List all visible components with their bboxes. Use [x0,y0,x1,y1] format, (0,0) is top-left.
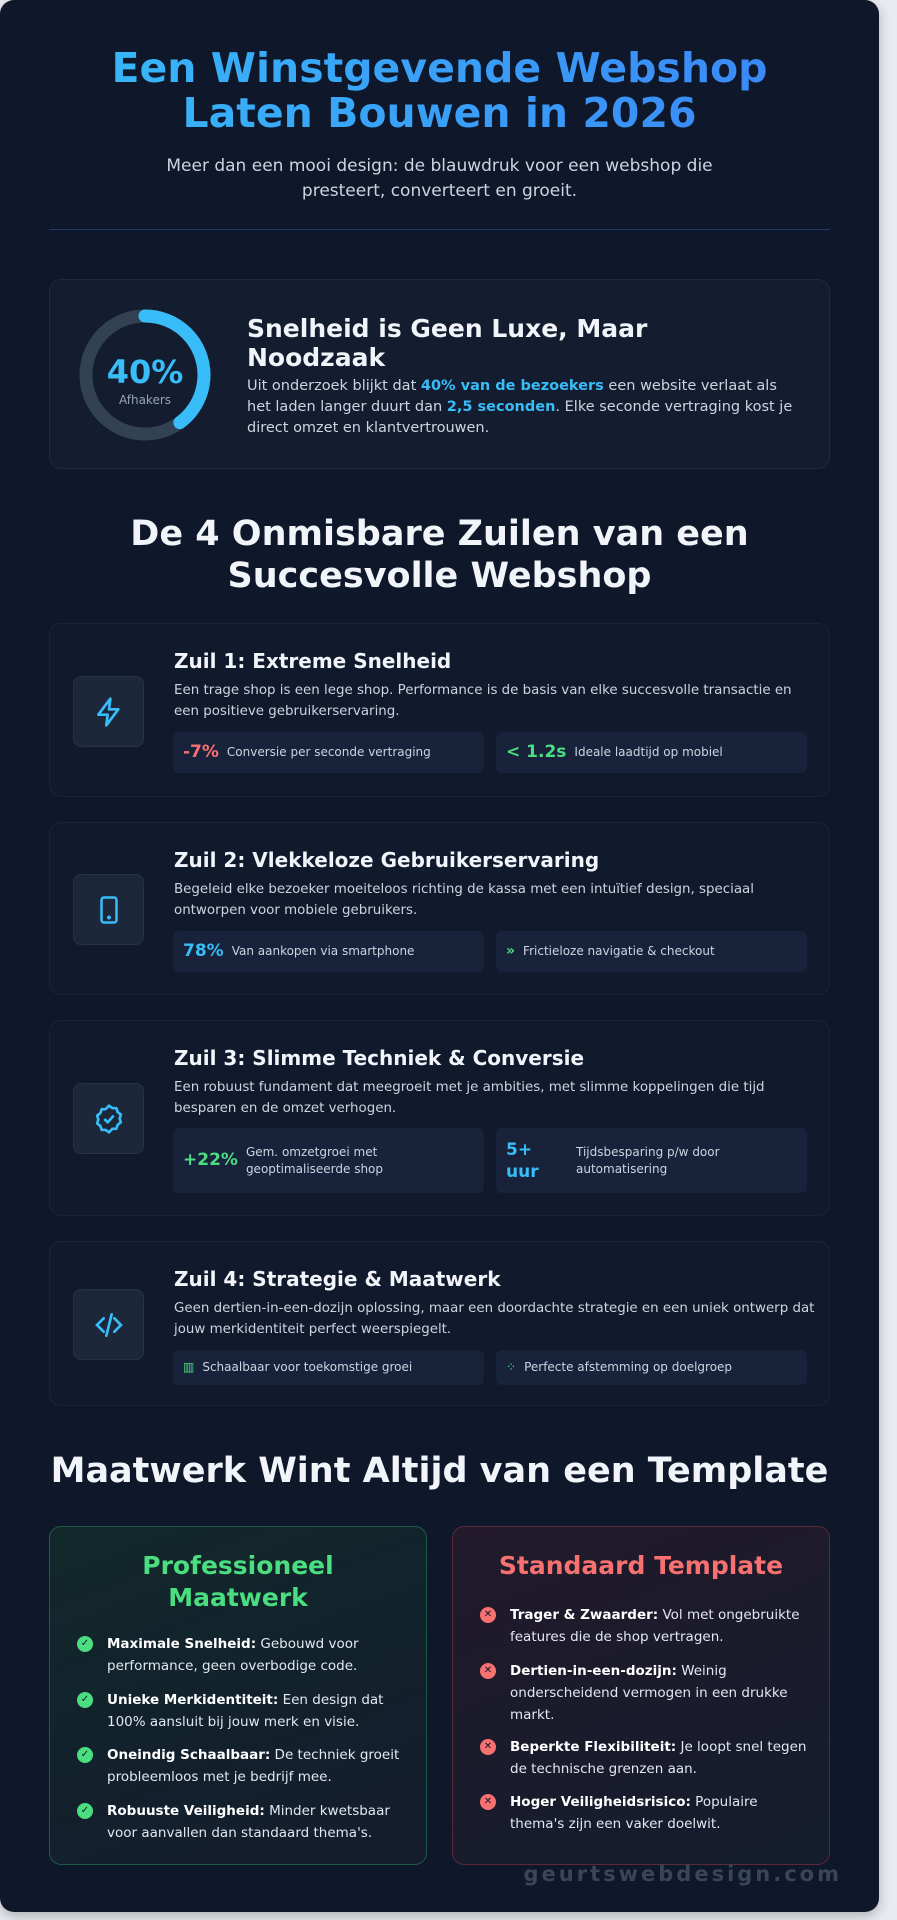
body text: Uit onderzoek blijkt dat 40% van de bezoekers een website verlaat als het laden langer duurt dan 2,5 seconden. Elke seconde vertraging kost je direct omzet en klantvertrouwen. [247,378,792,436]
stat: Perfecte afstemming op doelgroep [524,1360,732,1374]
title [0,46,879,136]
pillar title: Zuil 3: Slimme Techniek & Conversie [174,1046,584,1070]
list item: Robuuste Veiligheid: Minder kwetsbaar voor aanvallen dan standaard thema's. [107,1803,390,1841]
list item: ✕ [484,1609,492,1620]
list item: ✕ [484,1741,492,1752]
stat: ⁘ [506,1360,516,1374]
title: Laten Bouwen in 2026 [182,89,697,137]
stat: Ideale laadtijd op mobiel [574,745,723,759]
heading: Professioneel [142,1551,334,1580]
stat: Van aankopen via smartphone [232,944,414,958]
donut chart 40%: 40% [107,353,183,391]
pillar text: Een robuust fundament dat meegroeit met je ambities, met slimme koppelingen die tijd besparen en de omzet verhogen. [174,1080,765,1116]
section heading: pillars: De 4 Onmisbare Zuilen van een [130,514,749,554]
section heading: comparison: Maatwerk Wint Altijd van een Template [51,1451,828,1491]
heading [142,1551,334,1612]
pillar text: Een trage shop is een lege shop. Performance is de basis van elke succesvolle transactie en een positieve gebruikerservaring. [174,683,792,719]
donut chart 40%: Afhakers [119,393,171,407]
icon: badge check [73,1083,144,1154]
stat [496,1350,807,1385]
stat: 78% [183,941,224,961]
list item: ✓ [81,1638,89,1649]
list item: Unieke Merkidentiteit: Een design dat 100% aansluit bij jouw merk en visie. [107,1692,383,1730]
heading: Snelheid is Geen Luxe, Maar [247,314,647,343]
stat: 5+ [506,1140,532,1160]
stat: Schaalbaar voor toekomstige groei [202,1360,412,1374]
heading: Standaard Template [499,1551,783,1580]
stat: automatisering [576,1162,667,1176]
stat [173,732,484,773]
stat [496,1128,807,1193]
stat: ▥ [183,1360,194,1374]
list item: ✓ [81,1694,89,1705]
heading: Noodzaak [247,343,385,372]
heading: Maatwerk [168,1583,308,1612]
stat: Conversie per seconde vertraging [227,745,431,759]
panel: pillar 1 [49,623,830,797]
panel: pillar 4 [49,1241,830,1406]
watermark: geurtswebdesign.com [524,1862,842,1886]
panel: pillar 3 [49,1020,830,1216]
heading [247,314,648,372]
pillar title: Zuil 1: Extreme Snelheid [174,649,451,673]
list item: Trager & Zwaarder: Vol met ongebruikte features die de shop vertragen. [510,1607,800,1645]
pillar text: Geen dertien-in-een-dozijn oplossing, maar een doordachte strategie en een uniek ontwerp dat jouw merkidentiteit perfect weerspiegelt. [174,1301,814,1337]
subtitle: presteert, converteert en groeit. [302,181,577,201]
icon: lightning [73,676,144,747]
stat [173,931,484,972]
stat: Tijdsbesparing p/w door [576,1144,720,1158]
list item: Maximale Snelheid: Gebouwd voor performance, geen overbodige code. [107,1636,359,1674]
panel: standard template [452,1526,830,1865]
stat [173,1128,484,1193]
pillar title: Zuil 4: Strategie & Maatwerk [174,1267,501,1291]
panel: pillar 2 [49,822,830,995]
pillar title: Zuil 2: Vlekkeloze Gebruikerservaring [174,848,599,872]
stat [173,1350,484,1385]
icon: phone [73,874,144,945]
stat [496,931,807,972]
icon: code [73,1289,144,1360]
list item: ✕ [484,1796,492,1807]
subtitle [166,156,713,201]
stat: » [506,943,515,959]
list item: Beperkte Flexibiliteit: Je loopt snel tegen de technische grenzen aan. [510,1739,806,1777]
list item: Hoger Veiligheidsrisico: Populaire thema's zijn een vaker doelwit. [510,1794,758,1832]
panel: professional custom [49,1526,427,1865]
stat [496,732,807,773]
list item: ✓ [81,1749,89,1760]
section heading: pillars [130,514,749,596]
pillar text: Begeleid elke bezoeker moeiteloos richting de kassa met een intuïtief design, speciaal ontworpen voor mobiele gebruikers. [174,882,754,918]
title: Een Winstgevende Webshop [111,44,768,92]
donut chart 40% [80,310,210,440]
list item: ✓ [81,1805,89,1816]
subtitle: Meer dan een mooi design: de blauwdruk voor een webshop die [166,156,713,176]
list item: Dertien-in-een-dozijn: Weinig onderscheidend vermogen in een drukke markt. [510,1663,788,1723]
list item: ✕ [484,1665,492,1676]
stat: +22% [183,1150,238,1170]
section heading: pillars: Succesvolle Webshop [228,556,651,596]
stat: -7% [183,742,219,762]
stat: uur [506,1162,539,1182]
panel: speed stat [49,279,830,469]
stat: geoptimaliseerde shop [246,1162,383,1176]
stat: Frictieloze navigatie & checkout [523,944,715,958]
stat: < 1.2s [506,742,566,762]
list item: Oneindig Schaalbaar: De techniek groeit probleemloos met je bedrijf mee. [107,1747,399,1785]
stat: Gem. omzetgroei met [246,1144,377,1158]
